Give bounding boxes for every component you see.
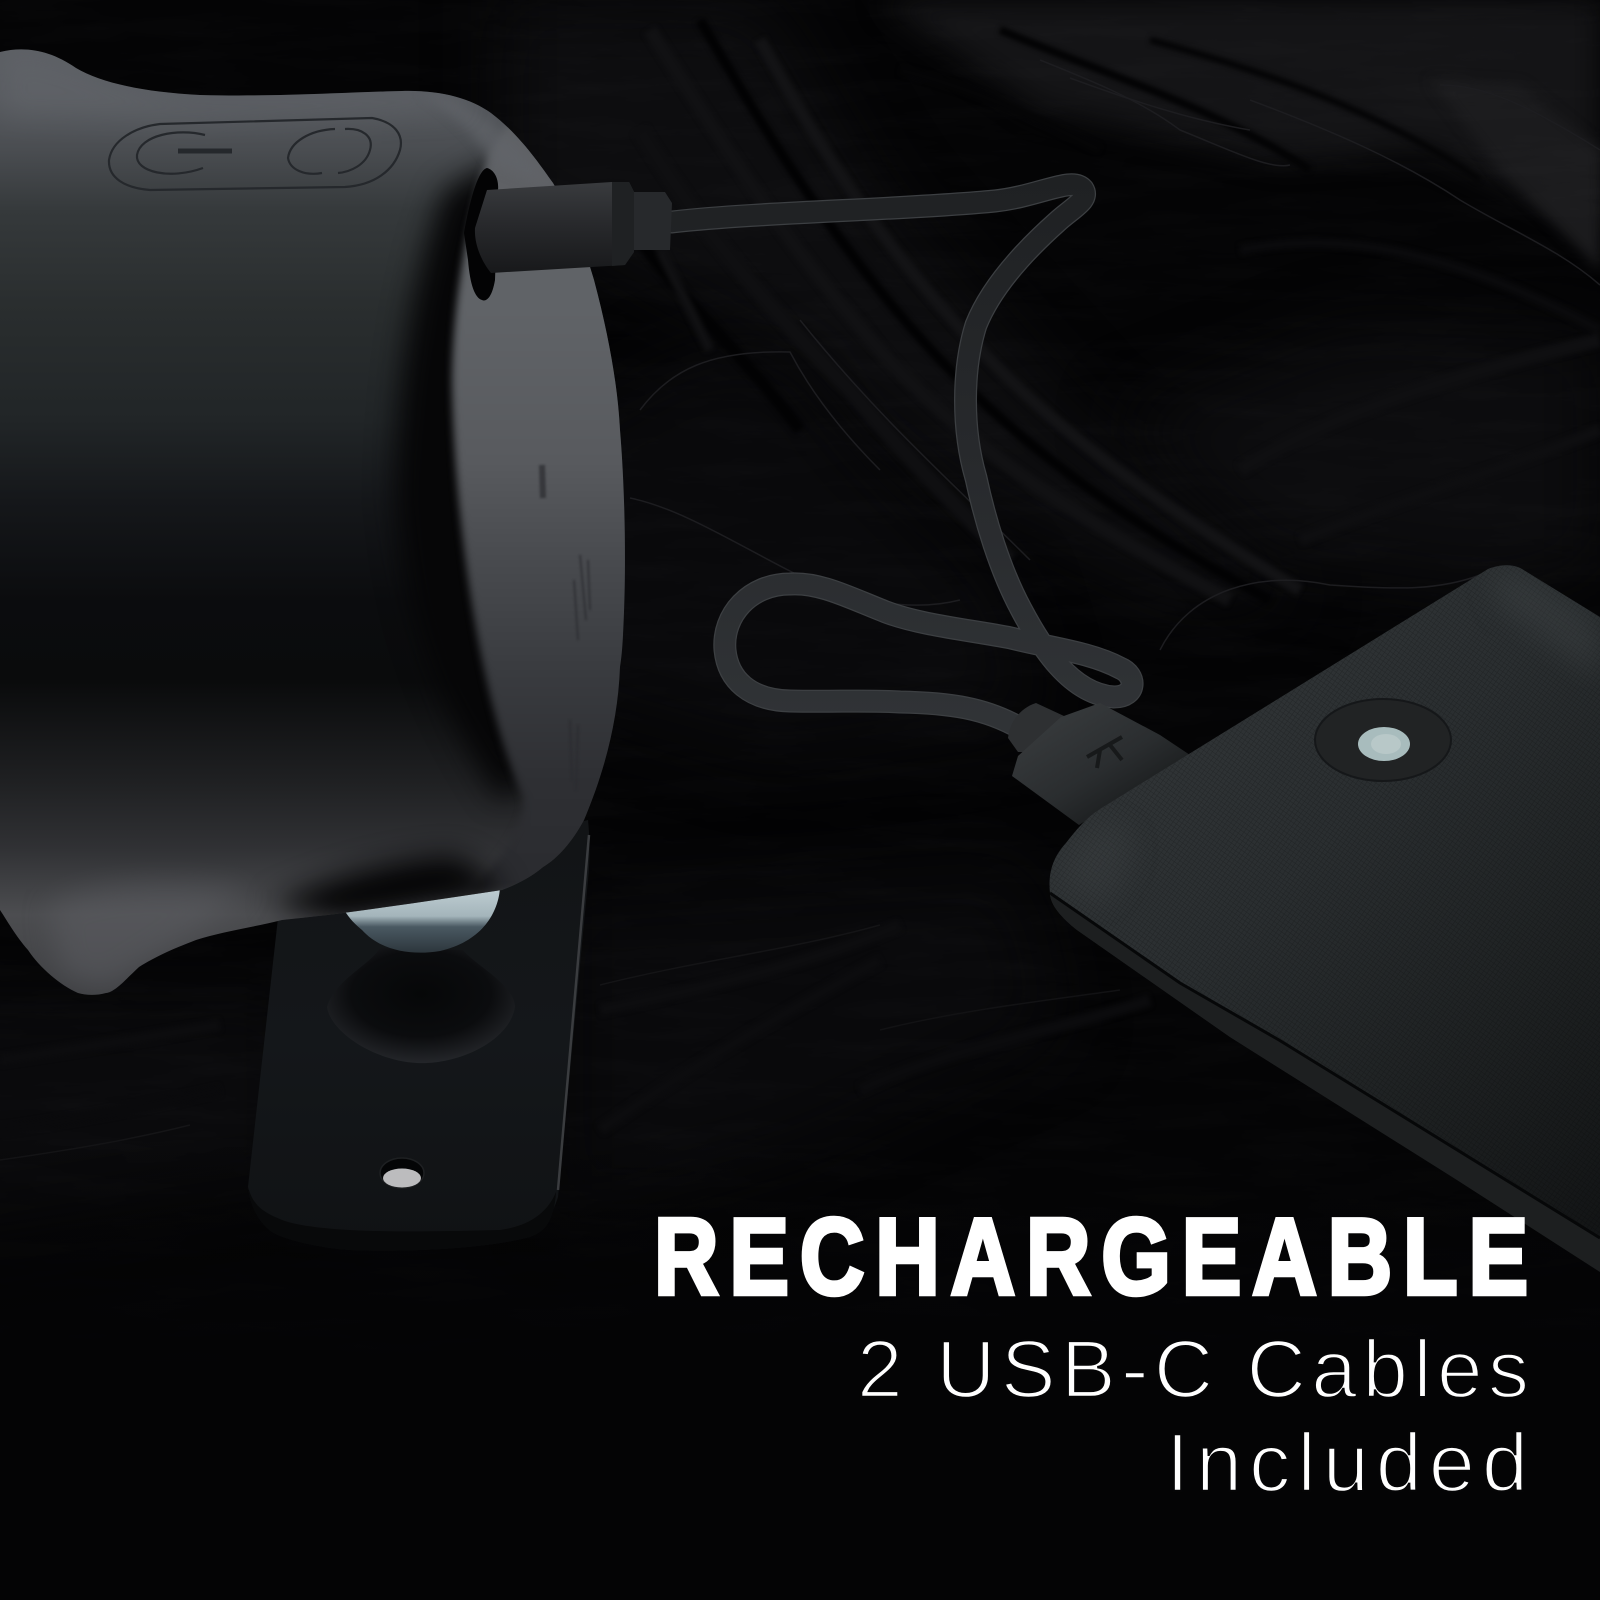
speaker shoulder highlight <box>457 110 500 154</box>
side rim <box>1040 893 1600 1290</box>
background broad lit regions <box>0 0 1600 1240</box>
speaker lower shadow blob <box>270 856 505 920</box>
text: included: Included <box>1166 1416 1528 1509</box>
speaker rear face <box>452 120 640 890</box>
heading: rechargeable: RECHARGEABLE <box>654 1197 1528 1318</box>
cable <box>672 185 1132 728</box>
text: 2 USB-C cables: 2 USB-C Cables <box>857 1324 1529 1415</box>
icon: USB plug at power bank <box>1008 703 1190 825</box>
background bottom fade <box>0 1130 1600 1600</box>
USB trident glyph <box>1087 737 1122 768</box>
icon: power bank <box>1040 560 1600 1290</box>
speaker shadow band between body and face <box>395 160 530 800</box>
icon: speaker body <box>0 0 640 1000</box>
power bank corner highlight <box>1060 823 1133 905</box>
icon: USB-C plug at speaker <box>475 182 672 273</box>
speaker port slot <box>464 168 498 300</box>
power bank button <box>1315 699 1451 781</box>
face scuffs <box>538 464 591 639</box>
background brush lines <box>0 60 1600 1160</box>
icon: embossed power and sync buttons <box>109 118 401 190</box>
icon: swivel ball <box>343 888 500 953</box>
icon: speaker mounting plate <box>248 820 590 1251</box>
speaker bottom-left flare highlight <box>63 885 218 984</box>
background diagonal brush strokes <box>0 20 1600 1130</box>
icon: swivel cone <box>327 948 515 1063</box>
icon: plate screw hole <box>380 1158 424 1188</box>
